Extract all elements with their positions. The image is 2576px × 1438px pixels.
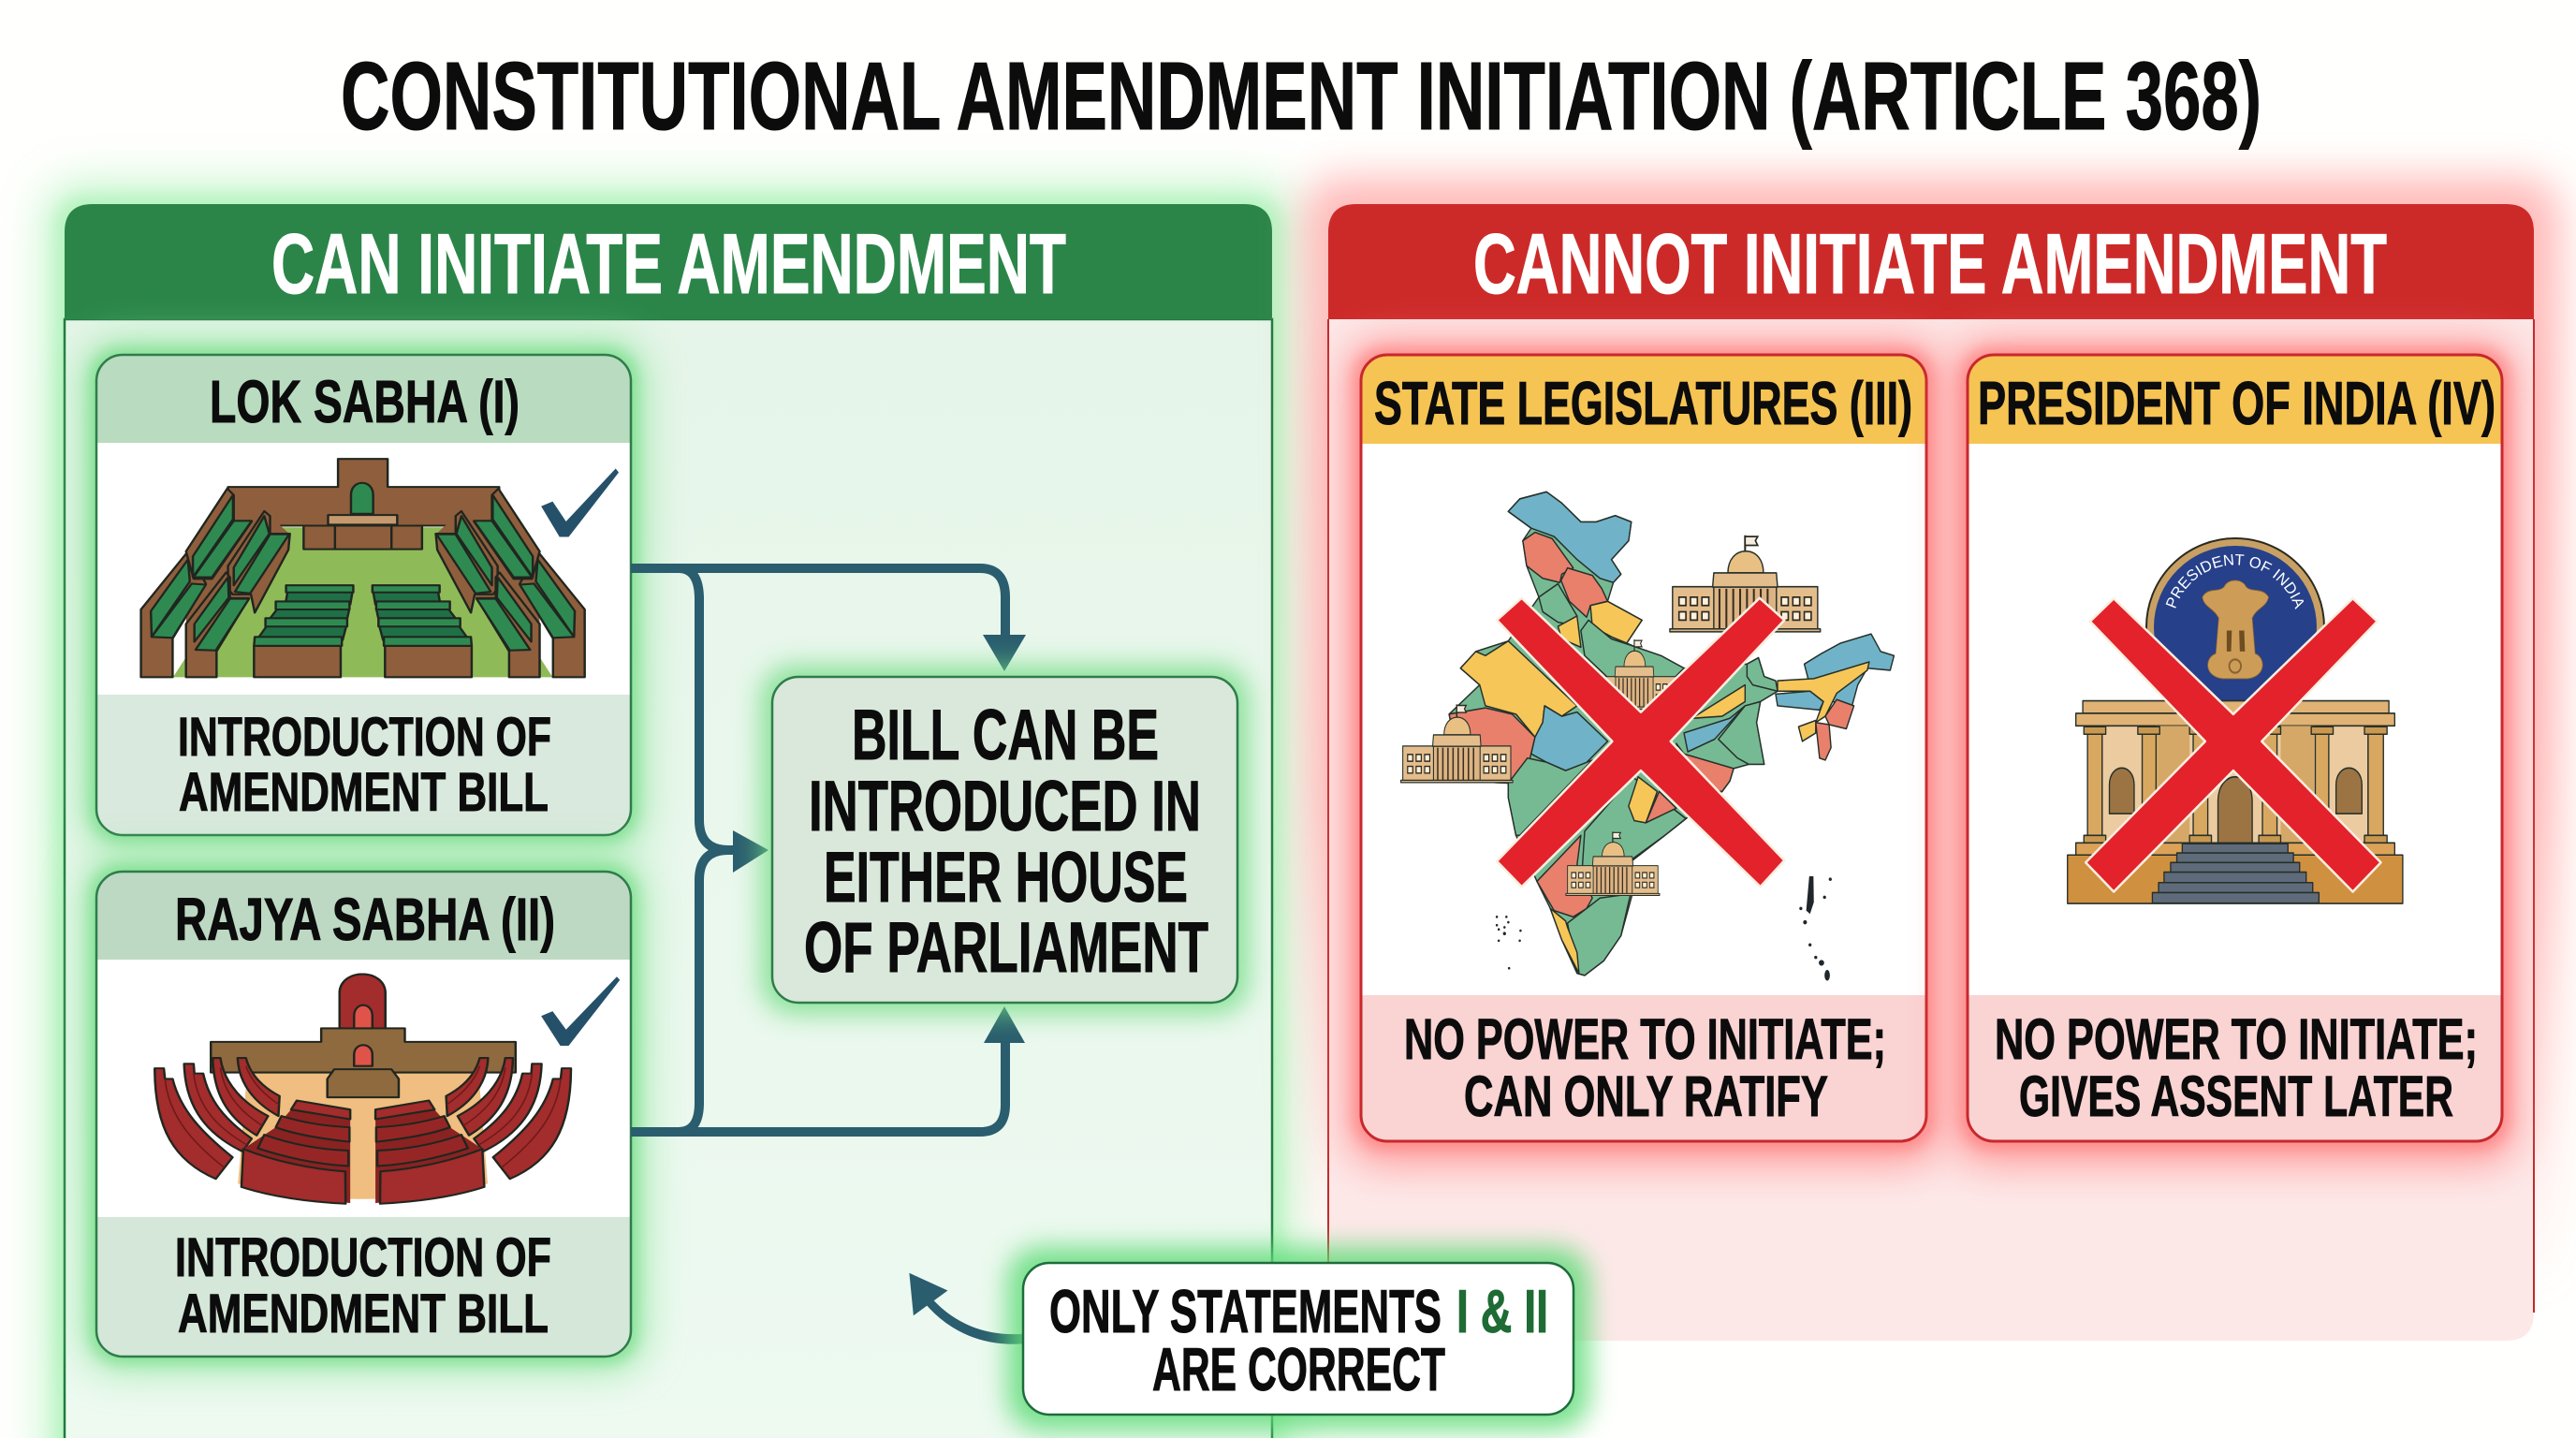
card: rajya sabha xyxy=(82,858,645,1371)
card: state legislatures: CAN ONLY RATIFY xyxy=(1464,1064,1828,1128)
card: state legislatures: NO POWER TO INITIATE; xyxy=(1404,1007,1886,1071)
callout: only statements I and II are correct: I & II xyxy=(1456,1277,1548,1345)
icon: president seal xyxy=(2145,537,2325,700)
central box: bill can be introduced: BILL CAN BE xyxy=(852,696,1159,775)
card: president of india xyxy=(1938,319,2541,1189)
card: lok sabha: LOK SABHA (I) xyxy=(210,368,520,435)
central box: bill can be introduced: INTRODUCED IN xyxy=(809,767,1201,846)
central box: bill can be introduced xyxy=(761,666,1249,1014)
callout: only statements I and II are correct xyxy=(1007,1247,1589,1431)
icon: india map with state legislature buildings xyxy=(1401,492,1894,981)
icon: lok sabha chamber xyxy=(141,459,585,677)
card: rajya sabha: RAJYA SABHA (II) xyxy=(175,886,555,953)
card: state legislatures xyxy=(1346,341,1941,1165)
icon: rajya sabha chamber xyxy=(154,975,571,1204)
panel: cannot initiate amendment xyxy=(1281,148,2576,1341)
icon: red cross over map xyxy=(1497,598,1784,887)
arrows: both houses to central box xyxy=(631,568,1026,1132)
card: lok sabha: AMENDMENT BILL xyxy=(179,762,549,823)
callout: only statements I and II are correct: ONLY STATEMENTS xyxy=(1049,1277,1442,1345)
card: rajya sabha: AMENDMENT BILL xyxy=(178,1284,549,1344)
callout: only statements I and II are correct: ARE CORRECT xyxy=(1152,1335,1445,1403)
icon: check mark xyxy=(541,976,620,1046)
arrow: callout to panel xyxy=(909,1273,1022,1339)
icon: red cross over building xyxy=(2086,598,2381,892)
card: lok sabha xyxy=(82,341,645,849)
icon: president seal: PRESIDENT OF INDIA xyxy=(2166,554,2305,609)
central box: bill can be introduced: EITHER HOUSE xyxy=(824,838,1188,917)
card: state legislatures: STATE LEGISLATURES (III) xyxy=(1374,369,1912,437)
card: rajya sabha: INTRODUCTION OF xyxy=(175,1227,551,1288)
central box: bill can be introduced: OF PARLIAMENT xyxy=(804,908,1208,988)
heading: can initiate xyxy=(65,204,1272,319)
icon: rashtrapati bhavan building xyxy=(2068,701,2403,903)
heading: can initiate: CAN INITIATE AMENDMENT xyxy=(271,217,1066,312)
card: lok sabha: INTRODUCTION OF xyxy=(178,707,551,768)
icon: check mark xyxy=(541,469,619,537)
panel: can initiate amendment xyxy=(41,180,1295,1438)
